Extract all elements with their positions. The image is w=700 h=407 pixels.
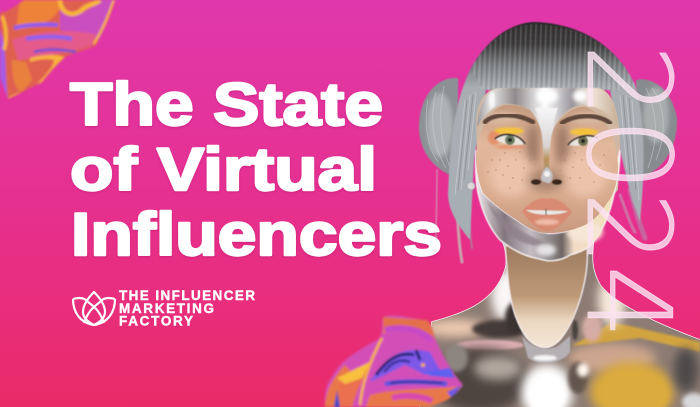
neck and shoulders chrome <box>420 235 700 407</box>
brand logo <box>73 288 255 328</box>
hair buns <box>419 78 677 178</box>
eyebrows <box>485 115 610 123</box>
earring <box>467 182 475 190</box>
eyes <box>495 135 597 146</box>
title <box>70 71 442 268</box>
face skin <box>476 105 618 233</box>
title: of Virtual <box>70 136 377 203</box>
brand name <box>119 288 255 328</box>
hair strands below the head <box>436 170 645 262</box>
forehead chrome <box>477 88 618 150</box>
icon: lotus <box>73 292 115 325</box>
mouth <box>522 198 572 231</box>
neck inner skin <box>505 245 587 348</box>
liquid blob bottom <box>324 314 464 407</box>
hair fringe strands <box>470 24 635 92</box>
face backing <box>476 88 620 230</box>
brand name: MARKETING <box>119 301 214 316</box>
lower jaw chrome <box>476 150 620 261</box>
brand name: THE INFLUENCER <box>119 288 255 303</box>
hair cap <box>448 22 644 240</box>
freckles <box>487 151 605 189</box>
eyeshadow <box>488 128 598 149</box>
year 2024 vertical: 2024 <box>560 44 695 339</box>
figure: virtual influencer <box>419 22 700 407</box>
nose chrome <box>531 167 562 185</box>
liquid blob top left <box>0 0 120 105</box>
nose bridge chrome <box>535 108 558 172</box>
brand name: FACTORY <box>119 314 193 328</box>
title: The State <box>70 71 383 138</box>
title: Influencers <box>71 201 442 268</box>
collar chrome <box>522 336 570 363</box>
